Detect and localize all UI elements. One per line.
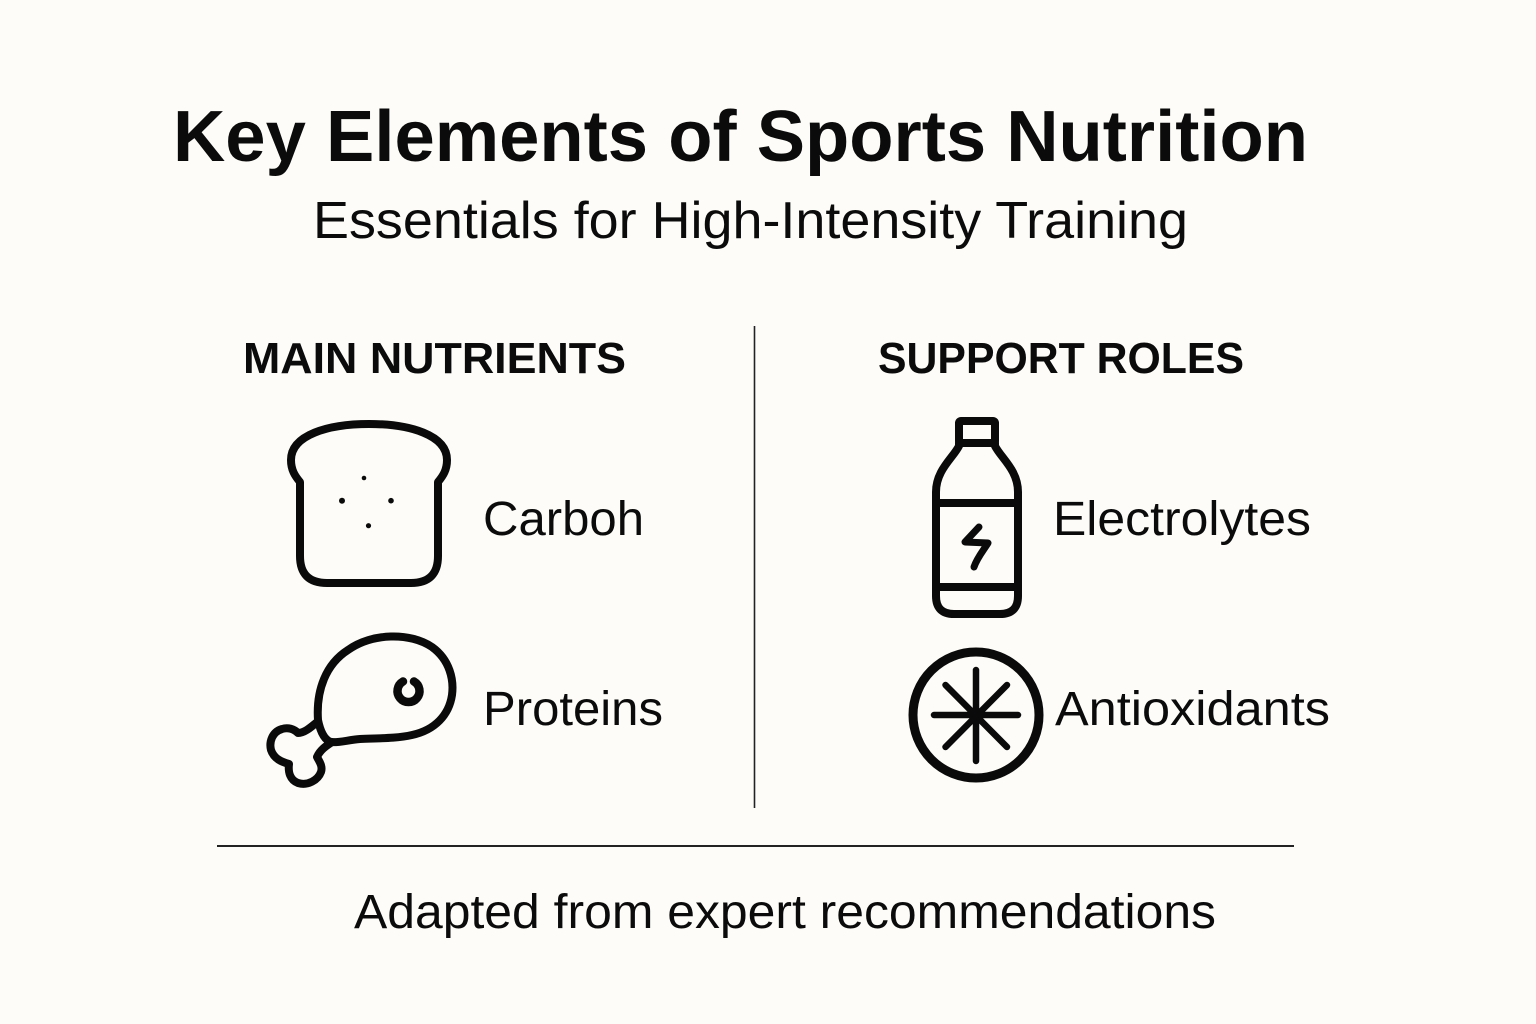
heading: main nutrients: MAIN NUTRIENTS (243, 334, 626, 383)
divider: horizontal (217, 845, 1294, 847)
icon: chicken drumstick (270, 636, 452, 784)
icon: bottle (936, 421, 1018, 614)
label: proteins: Proteins (483, 683, 663, 736)
panel: support roles (878, 334, 1330, 778)
title: Key Elements of Sports Nutrition (173, 97, 1308, 177)
label: electrolytes: Electrolytes (1053, 493, 1311, 546)
label: carboh: Carboh (483, 493, 644, 546)
panel: main nutrients (243, 334, 663, 784)
label: antioxidants: Antioxidants (1055, 683, 1330, 736)
heading: support roles: SUPPORT ROLES (878, 334, 1244, 383)
subtitle: Essentials for High-Intensity Training (313, 192, 1188, 250)
divider: vertical (754, 326, 756, 808)
footer note: Adapted from expert recommendations (354, 886, 1216, 939)
icon: bread (291, 424, 447, 583)
icon: citrus slice (913, 652, 1039, 778)
